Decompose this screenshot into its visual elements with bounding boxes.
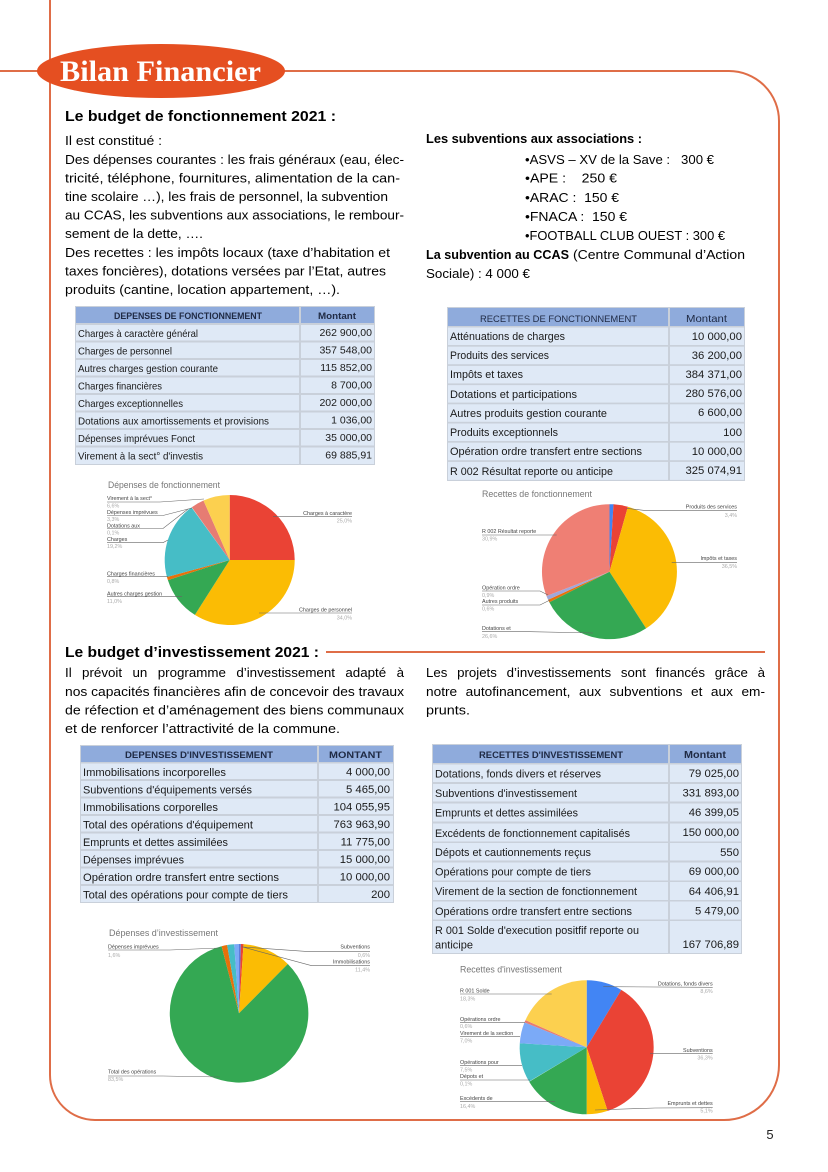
table: recettes d'investissement: Dépots et cautionnements reçus bbox=[435, 847, 591, 859]
pie chart: recettes d'investissement: 8,6% bbox=[700, 989, 713, 995]
table: recettes de fonctionnement: Autres produits gestion courante bbox=[450, 408, 607, 420]
table: dépenses d'investissement: Dépenses imprévues bbox=[83, 854, 184, 866]
text block: fonctionnement description: Des recettes : les impôts locaux (taxe d’habitation et bbox=[65, 245, 390, 260]
pie chart: dépenses de fonctionnement: 0,1% bbox=[107, 530, 119, 536]
text block: fonctionnement description: tricité, téléphone, fournitures, alimentation de la can- bbox=[65, 170, 400, 186]
table: dépenses de fonctionnement: Dotations aux amortissements et provisions bbox=[78, 416, 269, 428]
table: recettes de fonctionnement: 6 600,00 bbox=[698, 407, 742, 419]
table: recettes d'investissement bbox=[432, 744, 742, 954]
table: dépenses d'investissement: Total des opérations pour compte de tiers bbox=[83, 890, 289, 902]
pie chart: recettes d'investissement: 5,1% bbox=[700, 1108, 713, 1114]
pie chart: dépenses d'investissement: Dépenses imprévues bbox=[108, 944, 159, 950]
pie chart: recettes d'investissement: Opérations ordre bbox=[460, 1017, 500, 1023]
pie chart: dépenses d'investissement: 83,5% bbox=[108, 1077, 123, 1083]
table: dépenses de fonctionnement: Montant bbox=[318, 311, 357, 322]
pie chart: dépenses de fonctionnement: Dotations aux bbox=[107, 524, 140, 530]
text block: investissement left: et de renforcer l’attractivité de la commune. bbox=[65, 721, 340, 736]
pie chart: recettes de fonctionnement: Autres produits bbox=[482, 599, 519, 605]
text block: fonctionnement description: tine scolaire …), les frais de personnel, la subvention bbox=[65, 189, 388, 204]
table: dépenses d'investissement: 763 963,90 bbox=[333, 819, 390, 831]
table: recettes de fonctionnement: Produits exceptionnels bbox=[450, 427, 558, 439]
table: dépenses d'investissement: 5 465,00 bbox=[346, 784, 390, 796]
table: recettes de fonctionnement: 36 200,00 bbox=[692, 350, 742, 362]
table: dépenses de fonctionnement: 202 000,00 bbox=[319, 397, 372, 409]
text block: fonctionnement description: Il est constitué : bbox=[65, 133, 162, 148]
table: dépenses de fonctionnement: Virement à la sect° d'investis bbox=[78, 450, 203, 462]
table: dépenses de fonctionnement: Charges à caractère général bbox=[78, 328, 198, 340]
pie chart: dépenses d'investissement: Immobilisations bbox=[333, 960, 370, 966]
pie chart: recettes d'investissement: R 001 Solde bbox=[460, 988, 490, 994]
text block: subventions aux associations: Les subventions aux associations : bbox=[426, 131, 642, 146]
text block: subventions aux associations: (Centre Communal d’Action bbox=[573, 247, 745, 262]
pie chart: recettes de fonctionnement: 30,9% bbox=[482, 536, 497, 542]
text block: subventions aux associations: •ARAC : 150 € bbox=[525, 190, 620, 205]
table: recettes d'investissement: 550 bbox=[720, 847, 739, 859]
title banner: Bilan Financier: Bilan Financier bbox=[60, 55, 261, 88]
pie chart: dépenses d'investissement: Subventions bbox=[340, 944, 370, 950]
table: recettes d'investissement: 150 000,00 bbox=[682, 827, 739, 839]
pie chart: recettes de fonctionnement bbox=[482, 489, 737, 640]
text block: fonctionnement description: produits (cantine, location appartement, …). bbox=[65, 282, 340, 297]
text block: subventions aux associations: •FOOTBALL CLUB OUEST : 300 € bbox=[525, 228, 726, 243]
table: recettes d'investissement: Excédents de fonctionnement capitalisés bbox=[435, 828, 630, 840]
title banner: Bilan Financier bbox=[37, 44, 285, 98]
table: recettes d'investissement: Opérations pour compte de tiers bbox=[435, 866, 591, 878]
text block: investissement left: Il prévoit un programme d’investissement adapté à bbox=[65, 665, 405, 680]
pie chart: recettes de fonctionnement: Dotations et bbox=[482, 626, 511, 632]
text block: subventions aux associations: •FNACA : 150 € bbox=[525, 209, 628, 224]
table: recettes de fonctionnement: Impôts et taxes bbox=[450, 369, 523, 381]
pie chart: dépenses de fonctionnement: 25,0% bbox=[337, 518, 352, 524]
text block: investissement left bbox=[65, 665, 405, 736]
pie chart: dépenses de fonctionnement: 34,0% bbox=[337, 616, 352, 622]
table: recettes de fonctionnement: Atténuations de charges bbox=[450, 331, 565, 343]
table: recettes de fonctionnement: 384 371,00 bbox=[685, 369, 742, 381]
table: dépenses de fonctionnement: Charges financières bbox=[78, 380, 162, 392]
pie chart: recettes d'investissement: Emprunts et dettes bbox=[667, 1101, 713, 1107]
table: dépenses de fonctionnement: Charges exceptionnelles bbox=[78, 398, 183, 410]
pie chart: recettes d'investissement: Dotations, fonds divers bbox=[658, 982, 713, 988]
pie chart: recettes de fonctionnement: Recettes de fonctionnement bbox=[482, 489, 592, 499]
pie chart: dépenses de fonctionnement: 19,2% bbox=[107, 544, 122, 550]
pie chart: dépenses de fonctionnement: Charges de personnel bbox=[299, 608, 352, 614]
table: recettes d'investissement: anticipe bbox=[435, 940, 473, 952]
table: dépenses de fonctionnement: 357 548,00 bbox=[319, 344, 372, 356]
pie chart: dépenses de fonctionnement: Charges bbox=[107, 537, 128, 543]
table: dépenses de fonctionnement: 8 700,00 bbox=[331, 380, 372, 392]
text block: subventions aux associations: Sociale) : 4 000 € bbox=[426, 266, 531, 281]
text block: investissement right bbox=[426, 665, 766, 718]
pie chart: dépenses d'investissement: 11,4% bbox=[355, 968, 370, 974]
table: recettes d'investissement: 69 000,00 bbox=[689, 866, 739, 878]
table: recettes de fonctionnement: R 002 Résultat reporte ou anticipe bbox=[450, 466, 613, 478]
table: dépenses de fonctionnement: Charges de personnel bbox=[78, 346, 172, 358]
table: recettes d'investissement: Virement de la section de fonctionnement bbox=[435, 886, 637, 898]
table: dépenses de fonctionnement: DEPENSES DE FONCTIONNEMENT bbox=[114, 311, 262, 322]
text block: investissement right: notre autofinancement, aux subventions et aux em- bbox=[426, 684, 765, 699]
table: dépenses d'investissement: Immobilisations corporelles bbox=[83, 802, 218, 814]
pie chart: recettes de fonctionnement: Impôts et taxes bbox=[700, 556, 737, 562]
pie chart: recettes d'investissement: 0,1% bbox=[460, 1082, 472, 1088]
table: dépenses de fonctionnement: 1 036,00 bbox=[331, 414, 372, 426]
table: dépenses d'investissement bbox=[80, 745, 394, 903]
pie chart: dépenses d'investissement: 0,6% bbox=[358, 953, 370, 959]
table: recettes de fonctionnement: 10 000,00 bbox=[692, 331, 742, 343]
pie chart: recettes de fonctionnement: 0,9% bbox=[482, 593, 494, 599]
table: recettes de fonctionnement: Montant bbox=[686, 313, 727, 325]
pie chart: dépenses de fonctionnement: 0,8% bbox=[107, 579, 119, 585]
pie chart: recettes d'investissement: 7,5% bbox=[460, 1068, 472, 1074]
table: dépenses d'investissement: DEPENSES D'INVESTISSEMENT bbox=[125, 750, 273, 761]
table: dépenses d'investissement: 200 bbox=[371, 889, 390, 901]
pie chart: recettes d'investissement: Dépots et bbox=[460, 1074, 484, 1080]
pie chart: recettes d'investissement bbox=[460, 964, 713, 1114]
pie chart: recettes d'investissement: 18,3% bbox=[460, 996, 475, 1002]
table: recettes d'investissement: Opérations ordre transfert entre sections bbox=[435, 906, 632, 918]
table: dépenses de fonctionnement: 262 900,00 bbox=[319, 327, 372, 339]
pie chart: recettes d'investissement: Opérations pour bbox=[460, 1060, 499, 1066]
table: dépenses d'investissement: Total des opérations d'équipement bbox=[83, 820, 253, 832]
table: recettes de fonctionnement: 100 bbox=[723, 427, 742, 439]
table: recettes de fonctionnement bbox=[447, 307, 745, 481]
table: recettes d'investissement: Dotations, fonds divers et réserves bbox=[435, 768, 601, 780]
table: dépenses d'investissement: 4 000,00 bbox=[346, 766, 390, 778]
table: dépenses de fonctionnement: 69 885,91 bbox=[325, 450, 372, 462]
table: dépenses d'investissement: Opération ordre transfert entre sections bbox=[83, 872, 280, 884]
table: dépenses d'investissement: 104 055,95 bbox=[333, 802, 390, 814]
pie chart: recettes d'investissement: Subventions bbox=[683, 1048, 713, 1054]
table: dépenses de fonctionnement: Autres charges gestion courante bbox=[78, 363, 218, 375]
text block: investissement right: Les projets d’investissements sont financés grâce à bbox=[426, 665, 766, 680]
text block: fonctionnement description: Des dépenses courantes : les frais généraux (eau, élec- bbox=[65, 152, 404, 167]
table: dépenses de fonctionnement: Dépenses imprévues Fonct bbox=[78, 433, 195, 445]
text block: fonctionnement description: sement de la dette, …. bbox=[65, 226, 203, 241]
pie chart: recettes d'investissement: 7,0% bbox=[460, 1038, 472, 1044]
table: recettes de fonctionnement: Dotations et participations bbox=[450, 389, 577, 401]
page number: 5 bbox=[766, 1127, 774, 1142]
table: dépenses d'investissement: 11 775,00 bbox=[341, 836, 390, 848]
table: dépenses d'investissement: Immobilisations incorporelles bbox=[83, 767, 226, 779]
table: recettes d'investissement: R 001 Solde d'execution positfif reporte ou bbox=[435, 925, 639, 937]
table: recettes d'investissement: Emprunts et dettes assimilées bbox=[435, 808, 578, 820]
table: dépenses de fonctionnement: 115 852,00 bbox=[320, 362, 372, 374]
pie chart: recettes de fonctionnement: Opération ordre bbox=[482, 586, 520, 592]
text block: subventions aux associations: •ASVS – XV de la Save : 300 € bbox=[525, 152, 715, 167]
table: recettes d'investissement: 331 893,00 bbox=[682, 788, 739, 800]
text block: investissement left: nos capacités financières afin de concevoir des travaux bbox=[65, 684, 405, 699]
table: recettes d'investissement: RECETTES D'INVESTISSEMENT bbox=[479, 750, 623, 761]
pie chart: dépenses de fonctionnement: Charges financières bbox=[107, 572, 155, 578]
pie chart: recettes d'investissement: Recettes d'investissement bbox=[460, 964, 562, 974]
table: dépenses d'investissement: Emprunts et dettes assimilées bbox=[83, 837, 228, 849]
table: recettes de fonctionnement: Opération ordre transfert entre sections bbox=[450, 446, 643, 458]
pie chart: dépenses de fonctionnement: 6,6% bbox=[107, 504, 119, 510]
pie chart: dépenses de fonctionnement: Dépenses de fonctionnement bbox=[108, 480, 220, 490]
text block: subventions aux associations bbox=[426, 131, 745, 281]
pie chart: recettes d'investissement: 36,3% bbox=[697, 1056, 713, 1062]
text block: fonctionnement description: au CCAS, les subventions aux associations, le rembour- bbox=[65, 208, 404, 222]
heading: budget d'investissement: Le budget d’investissement 2021 : bbox=[65, 645, 319, 661]
pie chart: recettes de fonctionnement: 0,6% bbox=[482, 606, 494, 612]
table: dépenses d'investissement: 15 000,00 bbox=[340, 854, 390, 866]
pie chart: dépenses d'investissement: 1,6% bbox=[108, 953, 120, 959]
pie chart: dépenses d'investissement bbox=[108, 928, 370, 1083]
pie chart: dépenses de fonctionnement: Virement à la sect° bbox=[107, 496, 152, 502]
pie chart: recettes d'investissement: 0,6% bbox=[460, 1024, 472, 1030]
pie chart: dépenses de fonctionnement: Charges à caractère bbox=[303, 511, 352, 517]
table: recettes d'investissement: 46 399,05 bbox=[689, 807, 739, 819]
pie chart: dépenses d'investissement: Total des opérations bbox=[108, 1070, 157, 1076]
pie chart: dépenses de fonctionnement: 11,0% bbox=[107, 599, 122, 605]
table: dépenses d'investissement: MONTANT bbox=[329, 750, 382, 761]
table: recettes d'investissement: Subventions d'investissement bbox=[435, 788, 577, 800]
pie chart: recettes de fonctionnement: 36,5% bbox=[722, 564, 737, 570]
table: recettes de fonctionnement: 325 074,91 bbox=[685, 465, 742, 477]
table: recettes d'investissement: 167 706,89 bbox=[682, 939, 739, 951]
table: recettes de fonctionnement: RECETTES DE FONCTIONNEMENT bbox=[480, 314, 637, 325]
pie chart: recettes d'investissement: 16,4% bbox=[460, 1104, 475, 1110]
text block: investissement right: prunts. bbox=[426, 702, 470, 718]
table: recettes d'investissement: 79 025,00 bbox=[689, 768, 739, 780]
text block: subventions aux associations: •APE : 250 € bbox=[525, 170, 618, 186]
table: recettes d'investissement: 64 406,91 bbox=[689, 886, 739, 898]
table: dépenses de fonctionnement: 35 000,00 bbox=[325, 432, 372, 444]
table: recettes de fonctionnement: 280 576,00 bbox=[685, 388, 742, 400]
table: recettes de fonctionnement: 10 000,00 bbox=[692, 446, 742, 458]
pie chart: recettes d'investissement: Virement de la section bbox=[460, 1031, 513, 1037]
pie chart: recettes de fonctionnement: Produits des services bbox=[686, 504, 737, 510]
pie chart: dépenses d'investissement: Dépenses d’investissement bbox=[109, 928, 218, 938]
pie chart: recettes d'investissement: Excédents de bbox=[460, 1096, 493, 1102]
pie chart: dépenses de fonctionnement: 3,3% bbox=[107, 517, 119, 523]
table: recettes de fonctionnement: Produits des services bbox=[450, 350, 549, 362]
table: dépenses d'investissement: Subventions d'équipements versés bbox=[83, 784, 252, 796]
table: recettes d'investissement: 5 479,00 bbox=[695, 906, 739, 918]
text block: fonctionnement description bbox=[65, 133, 404, 297]
pie chart: recettes de fonctionnement: R 002 Résultat reporte bbox=[482, 529, 536, 535]
table: dépenses de fonctionnement bbox=[75, 306, 375, 465]
table: recettes d'investissement: Montant bbox=[684, 749, 727, 761]
pie chart: recettes de fonctionnement: 26,6% bbox=[482, 634, 497, 640]
text block: investissement left: de réfection et d’aménagement des biens communaux bbox=[65, 702, 405, 718]
pie chart: dépenses de fonctionnement: Dépenses imprévues bbox=[107, 510, 158, 516]
divider rule bbox=[326, 651, 765, 653]
text block: fonctionnement description: taxes foncières), dotations versées par l’Etat, autres bbox=[65, 264, 387, 278]
heading: budget de fonctionnement: Le budget de fonctionnement 2021 : bbox=[65, 109, 336, 125]
pie chart: dépenses de fonctionnement: Autres charges gestion bbox=[107, 592, 162, 598]
text block: subventions aux associations: La subvention au CCAS bbox=[426, 247, 569, 262]
pie chart: dépenses de fonctionnement bbox=[107, 480, 352, 625]
pie chart: recettes de fonctionnement: 3,4% bbox=[725, 513, 737, 519]
table: dépenses d'investissement: 10 000,00 bbox=[340, 872, 390, 884]
